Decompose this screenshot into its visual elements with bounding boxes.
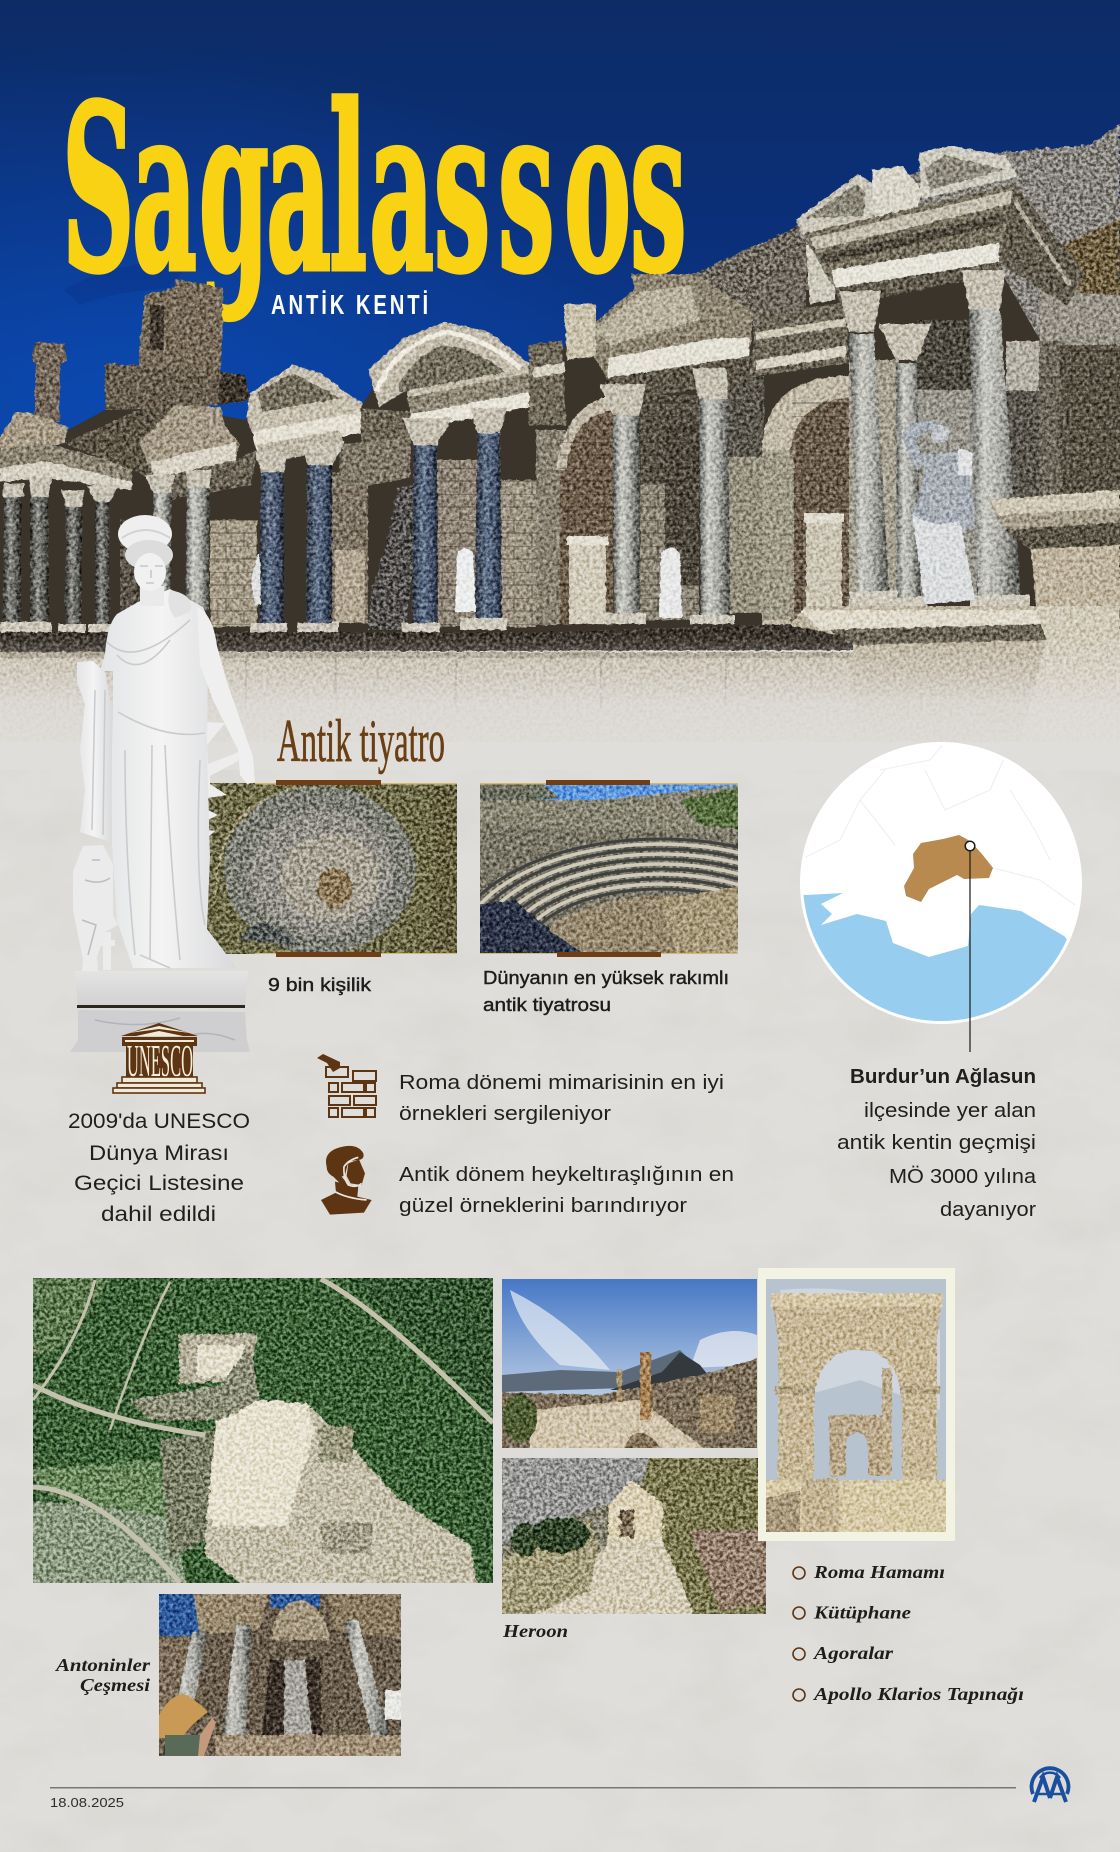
captions under theatre photos [268, 968, 729, 1015]
date: 18.08.2025 [50, 1795, 124, 1810]
subtitle: ANTİK KENTİ [271, 289, 431, 320]
text: Roman architecture [399, 1072, 724, 1125]
location text: antik kentin geçmişi [837, 1132, 1036, 1154]
text: sculpture: güzel örneklerini barındırıyor [399, 1195, 687, 1217]
photo: Heroon [502, 1458, 766, 1614]
photo: aerial view of the theatre [207, 783, 457, 954]
location text [837, 1066, 1037, 1221]
labels for photos: Çeşmesi [80, 1675, 150, 1695]
statue body [100, 589, 237, 968]
text: UNESCO [127, 1036, 193, 1086]
captions under theatre photos: antik tiyatrosu [483, 995, 611, 1015]
icon: UNESCO temple [113, 1023, 205, 1093]
photo: theatre seating [480, 783, 738, 954]
captions under theatre photos: Dünyanın en yüksek rakımlı [483, 968, 729, 988]
photo: ruins of the Antonine fountain [0, 146, 1120, 742]
podium [0, 606, 1050, 742]
province: Burdur [904, 835, 993, 902]
labels for photos: Antoninler [55, 1655, 151, 1675]
tower and column stub [32, 279, 250, 422]
statue pedestal [70, 971, 250, 1052]
silhouette base: dark stone filling behind everything [0, 270, 1120, 640]
captions under theatre photos: 9 bin kişilik [268, 975, 372, 995]
statue [70, 515, 255, 1052]
photo: aerial view of the city [33, 1278, 493, 1583]
UNESCO text [68, 1110, 250, 1226]
photo: mountain behind the facade [640, 124, 1120, 350]
location text: dayanıyor [940, 1199, 1036, 1221]
foreground ledge block [989, 490, 1120, 742]
small statues and pedestals [251, 513, 844, 624]
text: sculpture: Antik dönem heykeltıraşlığının en [399, 1164, 734, 1186]
icon: bricks [317, 1054, 376, 1117]
list of monuments: Roma Hamamı [813, 1562, 945, 1582]
location text: ilçesinde yer alan [864, 1100, 1036, 1122]
photo frame bars [276, 780, 661, 957]
fade of photo into paper [0, 635, 1120, 770]
aedicula right [582, 274, 753, 377]
list of monuments: Apollo Klarios Tapınağı [813, 1684, 1024, 1704]
labels for photos [55, 1621, 568, 1695]
statue arm [197, 607, 255, 784]
text: Roman architecture: Roma dönemi mimarisinin en iyi [399, 1072, 724, 1094]
reclining statue in niche [903, 420, 975, 604]
statue head [118, 515, 191, 618]
list of monuments: Agoralar [813, 1643, 894, 1663]
locator map [800, 742, 1082, 1052]
masonry joints [210, 345, 1120, 627]
province borders [800, 742, 1075, 905]
statue right side folds [207, 722, 239, 838]
statue left drapery [77, 661, 113, 842]
location text: Burdur’un Ağlasun [850, 1066, 1036, 1088]
text: sculpture [399, 1164, 734, 1217]
footer rule [50, 1787, 1016, 1788]
UNESCO text: Dünya Mirası [89, 1142, 229, 1165]
list of monuments: Kütüphane [813, 1602, 911, 1622]
back wall [120, 240, 1120, 630]
heading: Antik tiyatro: Antik tiyatro [277, 708, 445, 774]
labels for photos: Heroon [502, 1621, 568, 1641]
UNESCO text: Geçici Listesine [74, 1172, 244, 1195]
statue lion [73, 845, 118, 971]
waterfall [368, 485, 414, 630]
columns, left to right [0, 270, 1030, 633]
sky [0, 0, 1120, 640]
photo: Antonine fountain detail [159, 1594, 401, 1756]
UNESCO text: 2009'da UNESCO [68, 1110, 250, 1133]
photo: arch with light frame [758, 1268, 955, 1541]
UNESCO text: dahil edildi [101, 1203, 216, 1226]
list of monuments [793, 1562, 1024, 1704]
sea [804, 893, 1067, 1021]
logo: AA [1032, 1768, 1069, 1802]
statue folds [92, 620, 205, 968]
location pin and leader line [965, 841, 975, 1052]
icon: bust [321, 1146, 372, 1215]
location text: MÖ 3000 yılına [889, 1166, 1037, 1188]
text: Roman architecture: örnekleri sergileniyor [399, 1103, 611, 1125]
photo: agora and columns [502, 1279, 757, 1448]
title: Sagalassos [62, 55, 687, 323]
entablatures and pediments [0, 146, 1085, 500]
